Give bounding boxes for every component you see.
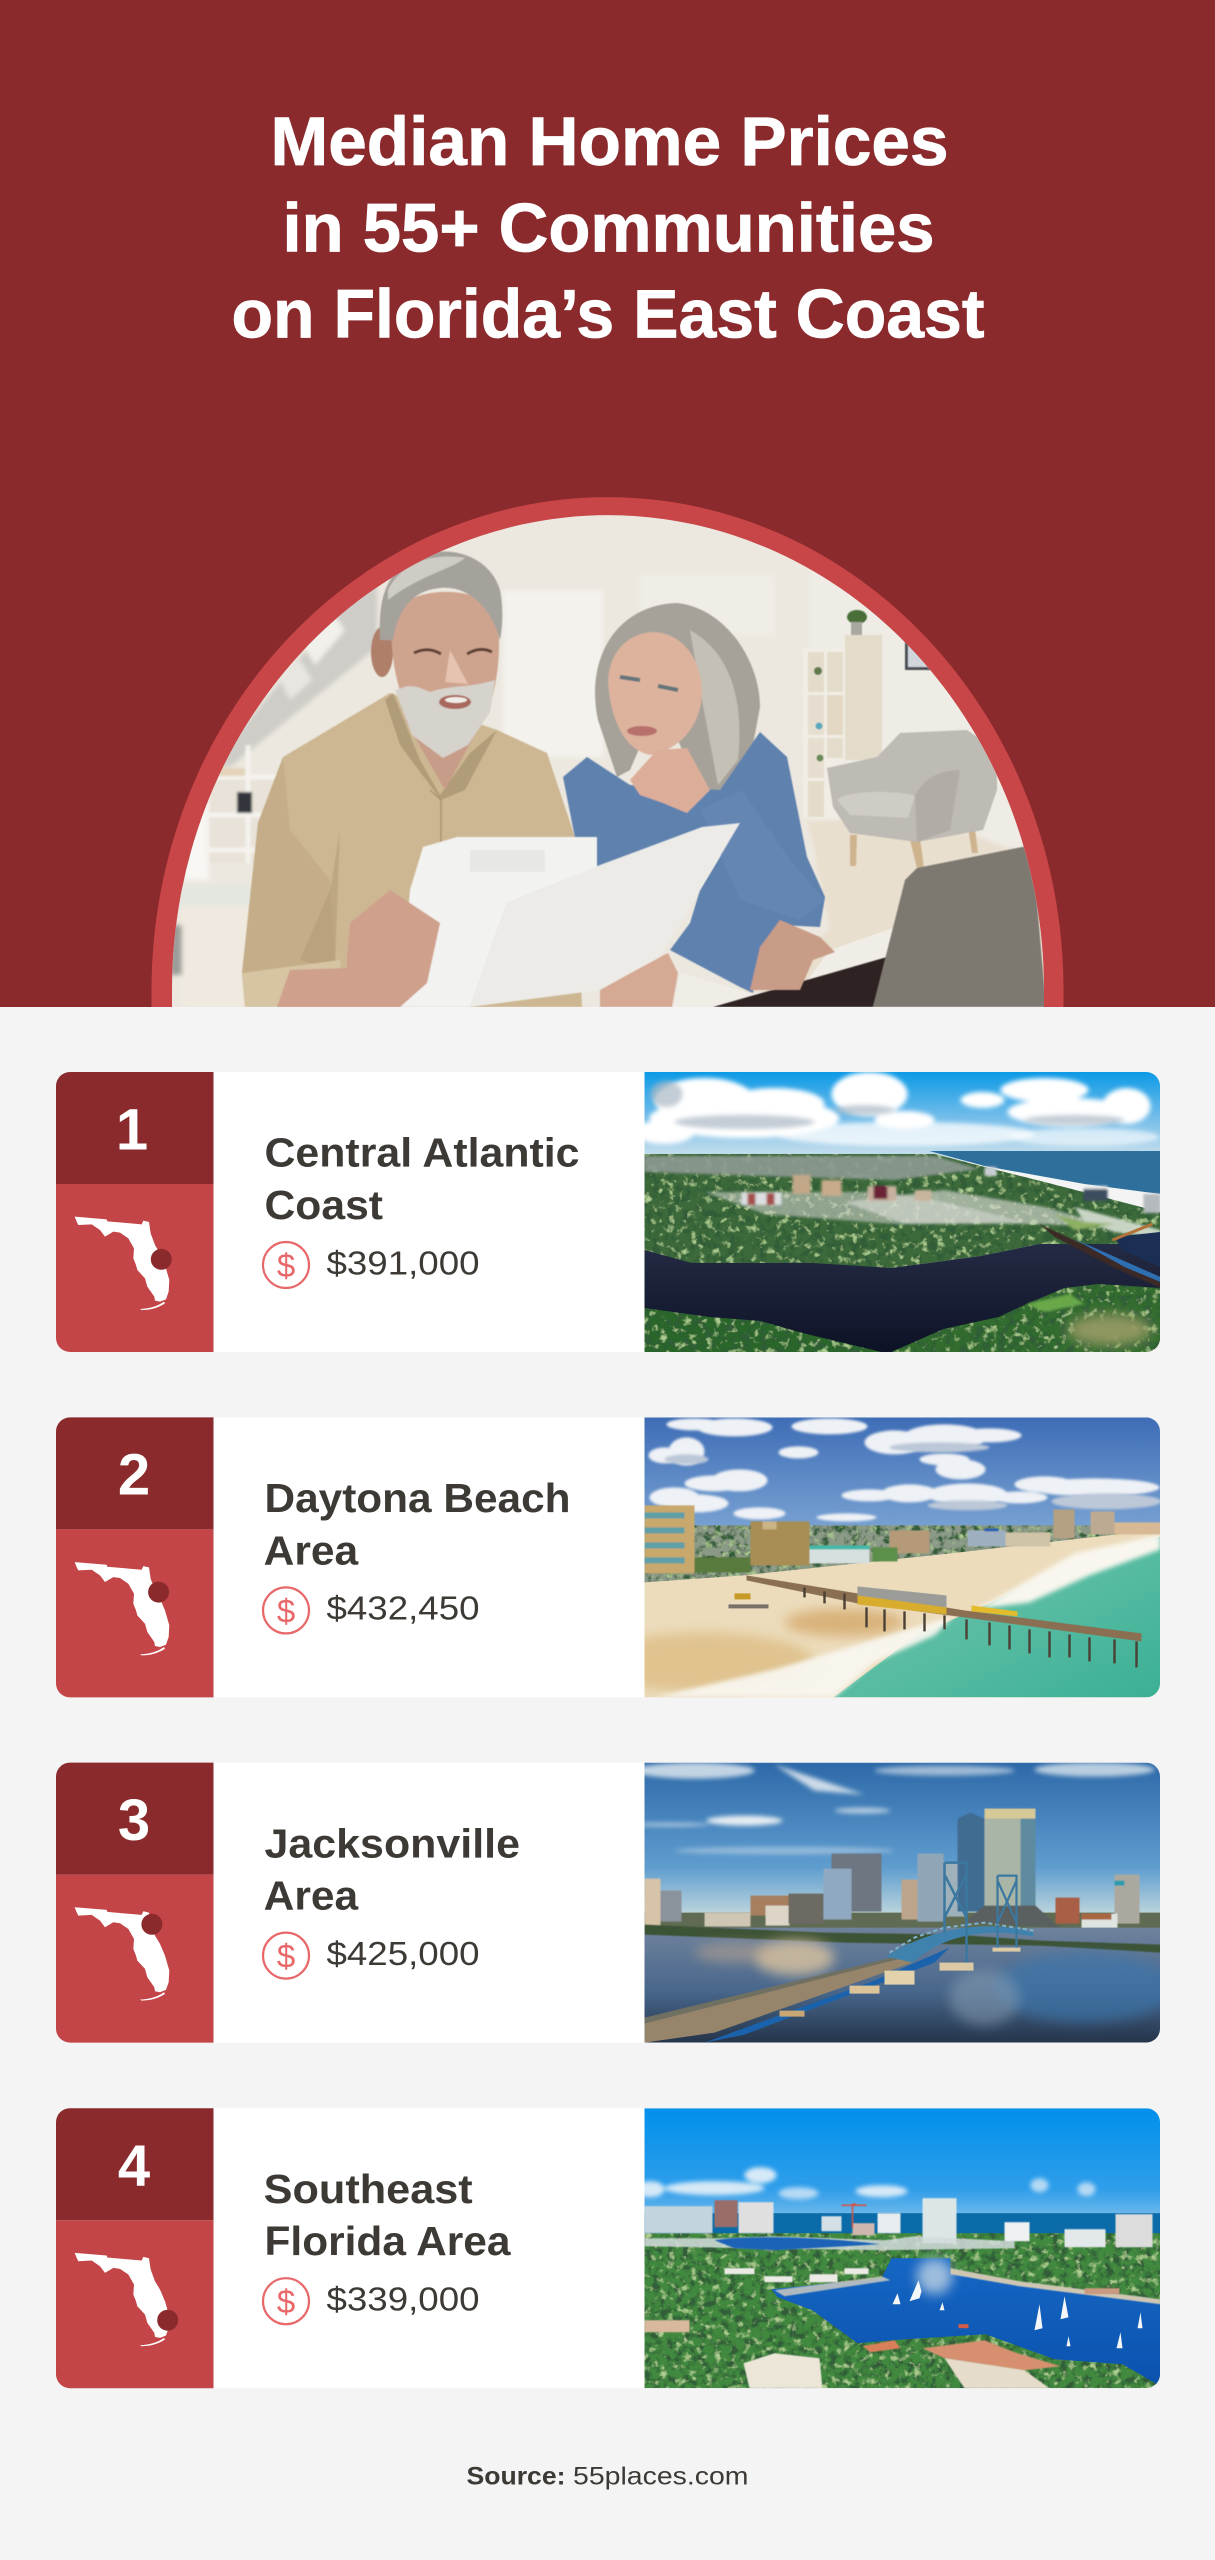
card 2: Daytona Beach Area xyxy=(56,1417,1162,1707)
water reflections xyxy=(754,1940,834,1976)
header panel xyxy=(0,0,1215,1010)
sea xyxy=(834,1536,1160,1697)
man's hand and forearm xyxy=(277,890,440,1007)
left shelf xyxy=(204,744,276,862)
rank number block xyxy=(56,1763,214,1875)
card 1: Central Atlantic Coast xyxy=(56,1072,1160,1352)
waterfront homes xyxy=(644,2268,1120,2388)
dollar icon: $ xyxy=(277,1592,295,1629)
price: $425,000 xyxy=(326,1936,480,1973)
arch frame xyxy=(152,497,1064,1007)
photo: couple reviewing papers xyxy=(170,510,1050,1010)
region name: Area xyxy=(264,1873,359,1919)
region name: Daytona Beach xyxy=(264,1475,570,1521)
pier xyxy=(728,1575,1142,1667)
region name: Coast xyxy=(264,1182,383,1228)
region name xyxy=(264,1475,570,1573)
bridge xyxy=(644,1863,1034,2043)
rank number block xyxy=(56,1417,214,1529)
sailboats xyxy=(892,2280,1142,2348)
dollar icon: $ xyxy=(277,1247,295,1284)
region name: Southeast xyxy=(264,2166,473,2212)
dollar icon xyxy=(263,1242,309,1288)
armchair xyxy=(827,730,997,868)
dollar icon: $ xyxy=(277,2283,295,2320)
skyline xyxy=(644,2198,1152,2250)
region name xyxy=(264,2166,512,2264)
title xyxy=(232,103,985,352)
beachfront towers xyxy=(644,1505,1160,1573)
desk xyxy=(716,928,893,1004)
woman xyxy=(563,603,835,1007)
rank number block: 4 xyxy=(118,2133,150,2198)
photo: waterfront and marina xyxy=(636,2108,1160,2388)
rank number block: 1 xyxy=(116,1097,148,1162)
man xyxy=(242,551,582,1007)
title: Median Home Prices xyxy=(270,103,948,180)
title: on Florida’s East Coast xyxy=(232,276,985,352)
price: $391,000 xyxy=(326,1245,480,1282)
Florida map with location dot xyxy=(56,1529,214,1697)
photo: downtown skyline and bridge xyxy=(630,1763,1174,2043)
title: in 55+ Communities xyxy=(282,190,934,266)
region name: Area xyxy=(264,1527,359,1573)
dollar icon xyxy=(263,1933,309,1979)
region name: Jacksonville xyxy=(264,1820,520,1866)
card 3: Jacksonville Area xyxy=(56,1763,1174,2043)
price: $432,450 xyxy=(326,1591,480,1628)
region name: Central Atlantic xyxy=(264,1130,580,1176)
lagoon xyxy=(772,2258,1160,2386)
right shelf, plant and picture xyxy=(808,609,930,817)
region name xyxy=(264,1820,520,1919)
source line: Source: xyxy=(466,2462,566,2490)
photo: beach and pier xyxy=(644,1418,1160,1698)
card 4: Southeast Florida Area xyxy=(56,2108,1160,2388)
Florida map with location dot xyxy=(56,2220,214,2388)
laptop xyxy=(713,845,1046,1007)
rank number block xyxy=(56,2108,214,2220)
region name: Florida Area xyxy=(264,2218,512,2264)
rank number block xyxy=(56,1072,214,1184)
dollar icon xyxy=(263,1587,309,1633)
region name xyxy=(264,1130,580,1228)
price: $339,000 xyxy=(326,2281,480,2318)
source line xyxy=(466,2462,748,2490)
rank number block: 3 xyxy=(118,1788,150,1853)
dollar icon: $ xyxy=(277,1938,295,1975)
photo: aerial of river and town xyxy=(634,1072,1160,1352)
Florida map with location dot xyxy=(56,1184,214,1352)
source line: 55places.com xyxy=(573,2462,748,2490)
rank number block: 2 xyxy=(118,1443,150,1508)
dollar icon xyxy=(263,2278,309,2324)
papers xyxy=(400,823,740,1007)
Florida map with location dot xyxy=(56,1875,214,2043)
